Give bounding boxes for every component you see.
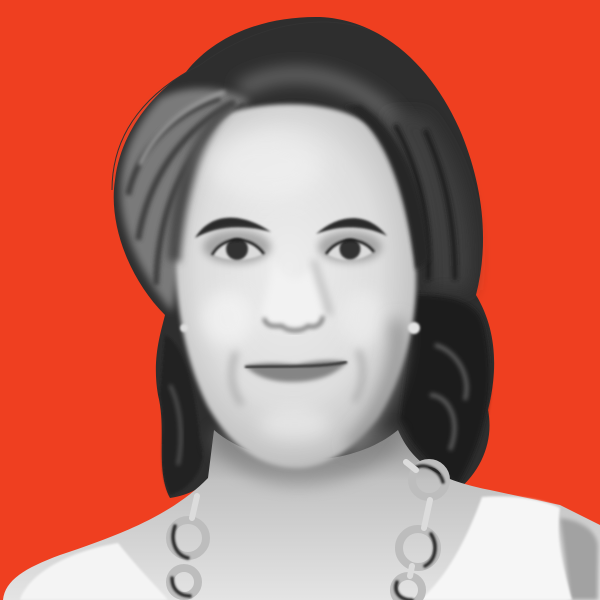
face xyxy=(168,100,430,468)
earrings xyxy=(180,322,420,334)
nose xyxy=(260,258,326,331)
smile lines xyxy=(232,350,363,405)
white sleeveless top xyxy=(20,496,572,600)
necklace xyxy=(170,462,446,600)
chin highlight xyxy=(260,409,330,441)
eyebrows xyxy=(195,218,271,238)
neck and shoulders xyxy=(3,430,600,600)
hair xyxy=(112,17,494,498)
eyes xyxy=(203,230,271,264)
mouth xyxy=(245,360,347,382)
